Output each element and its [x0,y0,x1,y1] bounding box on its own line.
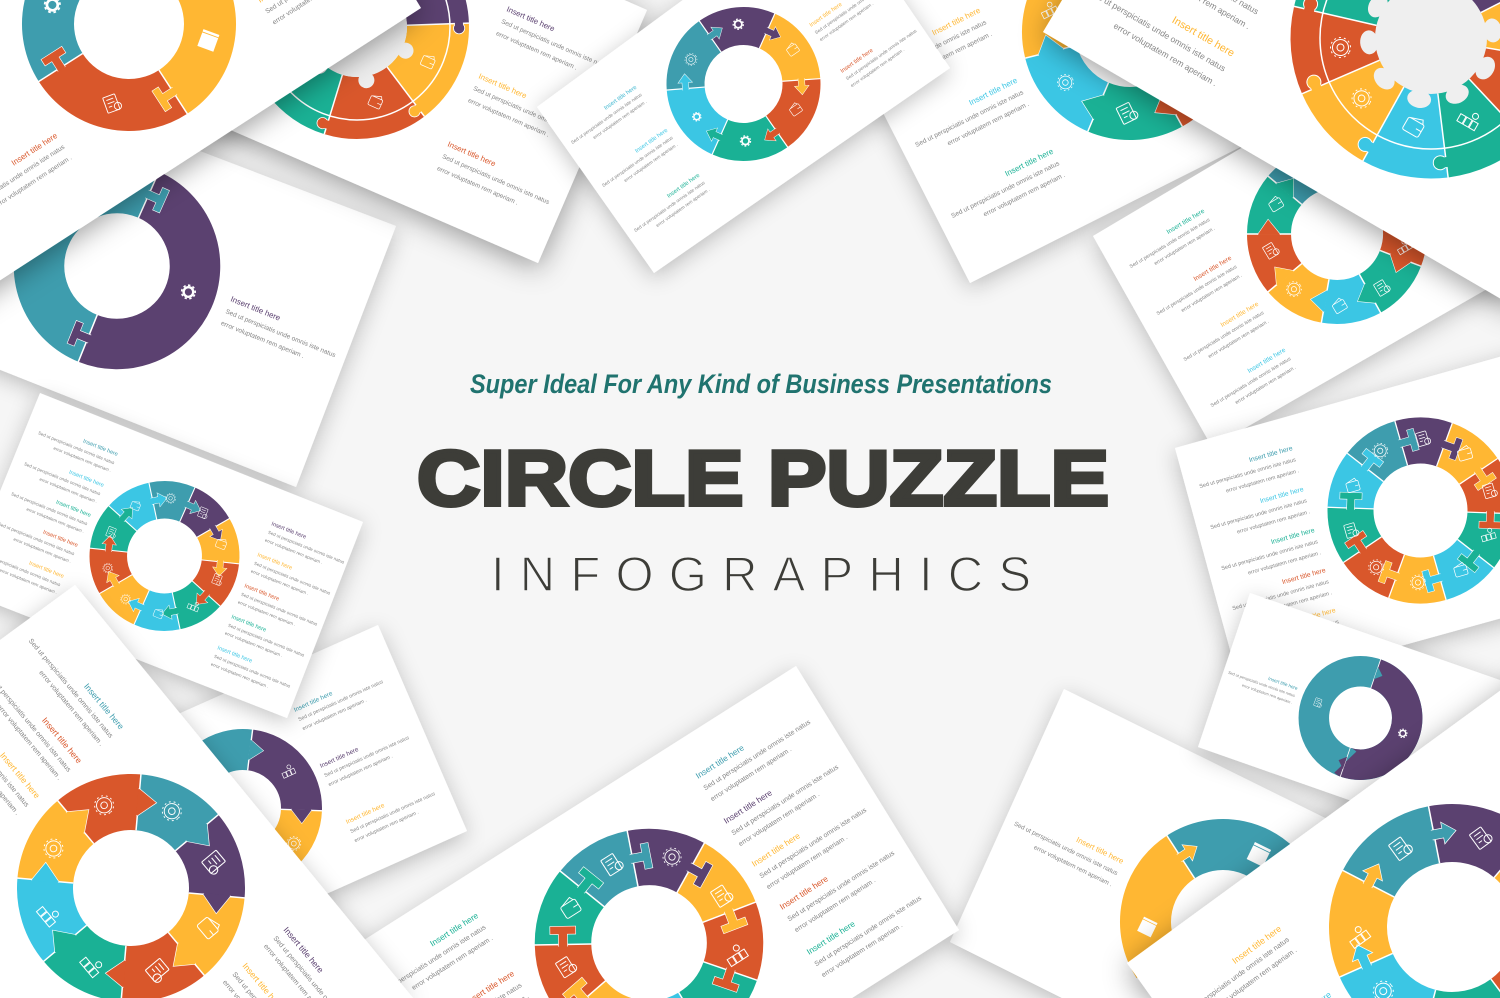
icon: tools [153,607,164,619]
text block: green title: error voluptatem rem aperiam . [1247,550,1322,576]
icon: newspaper [601,852,625,876]
text block: green title: Insert title here [1004,146,1055,178]
slide card [0,0,421,345]
text block: green title: error voluptatem rem aperiam . [982,172,1067,218]
text block: green title: Sed ut perspiciatis unde omnis iste natus [633,180,706,233]
slide card [0,393,363,718]
text block: yellow title, lower [221,961,330,998]
text block: yellow title: error voluptatem rem aperiam . [909,31,994,77]
panel: slide with three-piece T ring, top left [0,0,421,345]
icon: newspaper [1415,430,1431,447]
icon: checklist [710,883,734,908]
icon: idea [164,492,177,505]
text block: yellow title: Insert title here [1170,14,1237,60]
text block: orange title, left [0,513,79,564]
text block: orange title, left [405,968,531,998]
text block: orange title: Sed ut perspiciatis unde omnis iste natus [787,850,896,923]
icon: bar growth [1137,917,1158,937]
slide card [800,0,1300,283]
text block: deep teal title: Insert title here [82,681,126,731]
slide card [537,0,950,273]
text block: orange title: Insert title here [840,48,875,75]
text block: green title [944,146,1067,232]
text block: yellow title: Sed ut perspiciatis unde omnis iste natus [1183,310,1266,363]
text block: blue title: Insert title here [1259,486,1305,505]
icon: newspaper [1373,278,1391,296]
icon: people [1480,527,1496,542]
slide card [1093,60,1500,447]
text block: yellow title, left: Insert title here [28,561,64,580]
text block: purple title: error voluptatem rem aperiam . [328,754,394,788]
text block: yellow title: error voluptatem rem aperiam . [1112,21,1219,88]
text block: blue title: error voluptatem rem aperiam . [623,142,679,183]
icon: coins [91,792,117,819]
text block: green title [1217,527,1322,583]
text block: yellow title: Sed ut perspiciatis unde omnis iste natus [1242,619,1340,652]
text block: blue title: Sed ut perspiciatis unde omnis iste natus [1210,498,1308,531]
ring chart: T-joint pieces [17,0,241,136]
panel: slide with two-piece ring, lower right [1198,593,1500,874]
icon: idea [1284,279,1304,299]
text block: orange title: Sed ut perspiciatis unde omnis iste natus [845,28,918,81]
text block: yellow title [345,781,441,844]
ring chart: two pieces [14,163,220,369]
panel: slide with nine-piece T ring, bottom centre [320,666,959,998]
text block: deep teal title: Sed ut perspiciatis unde omnis iste natus [27,638,114,740]
text block: blue title, left: error voluptatem rem aperiam . [39,477,98,504]
text block: deep teal title: Sed ut perspiciatis unde omnis iste natus [570,92,643,145]
text block: deep teal title, left: Sed ut perspiciatis unde omnis iste natus [37,430,116,466]
icon: cloud [691,111,703,123]
text block: yellow title: Insert title here [1075,835,1125,866]
icon: wallet [1345,477,1360,493]
slide card [150,0,647,263]
text block: deep teal title: error voluptatem rem aperiam . [1225,468,1300,494]
text block: deep teal title [694,705,819,803]
text block: orange title [1228,567,1333,623]
text block: yellow title: error voluptatem rem aperiam . [467,97,550,139]
icon: checklist [106,526,118,539]
text block: orange title: error voluptatem rem aperiam . [436,165,519,207]
icon: people [1457,107,1482,131]
text block: blue title: Insert title here [634,128,669,155]
text block: deep teal title [1225,663,1299,705]
text block: purple title: error voluptatem rem aperiam . [264,538,323,565]
text block: green title [628,172,711,240]
text block: yellow title: Insert title here [1291,607,1337,626]
ring chart: arrow joints [663,3,824,165]
icon: document [1039,0,1059,19]
text block: green title: Insert title here [1166,208,1206,236]
icon: idea [119,593,132,606]
text block: yellow title, left: error voluptatem rem aperiam . [0,568,58,595]
slide card [0,90,396,487]
text block: deep teal title, left: Insert title here [82,439,118,458]
icon: safe [1262,241,1280,259]
text block: green title, left: Sed ut perspiciatis unde omnis iste natus [10,491,89,527]
panel: slide with six-piece arrow ring, top centre [537,0,950,273]
icon: idea [1409,573,1427,592]
text block: purple title [264,521,349,573]
icon: idea [40,835,67,862]
icon: safe [555,955,578,978]
text block: deep teal title: error voluptatem rem aperiam . [37,670,104,748]
text block: deep teal title: Insert title here [603,85,638,112]
text block: yellow title: error voluptatem rem aperiam . [766,834,849,891]
text block: yellow title [256,0,379,26]
text block: purple title [220,295,343,371]
text block: orange title: Insert title here [446,140,497,168]
text block: yellow title: Insert title here [477,72,528,100]
text block: yellow title: Insert title here [345,802,386,826]
text block: blue title [1204,346,1298,418]
slide card [1043,0,1500,310]
icon: tools [1331,297,1348,314]
icon: coins [101,562,114,575]
text block: orange title: Insert title here [40,715,84,765]
text block: yellow title [467,72,587,150]
text block: green title: error voluptatem rem aperiam . [821,922,904,979]
ring chart: wedge pieces [1019,0,1241,143]
text block: yellow title: Sed ut perspiciatis unde omnis iste natus [759,807,868,880]
text block: green title [1123,207,1217,279]
text block: blue title: Insert title here [216,645,253,665]
text block: green title: Sed ut perspiciatis unde omnis iste natus [814,895,923,968]
ring chart: wedge pieces [1241,138,1433,330]
text block: orange title: Insert title here [10,131,60,168]
text block: purple title: error voluptatem rem aperiam . [738,791,821,848]
text block: purple title [722,750,847,848]
text block: blue title: Sed ut perspiciatis unde omnis iste natus [914,89,1025,149]
icon: badges [1345,924,1371,948]
icon: people [80,952,105,978]
panel: slide with small two-piece wedge ring, lower left [120,625,467,946]
icon: wallet [215,537,228,550]
text block: orange title: Insert title here [1281,567,1327,586]
text block: green title: Insert title here [805,918,857,957]
text block: purple title: Insert title here [281,925,326,975]
text block: yellow title: Sed ut perspiciatis unde omnis iste natus [253,561,332,596]
text block: yellow title: error voluptatem rem aperiam . [1207,319,1270,360]
text block: orange title: Sed ut perspiciatis unde omnis iste natus [441,153,550,206]
icon: gear [733,19,743,29]
text block: green title, left: error voluptatem rem aperiam . [411,935,494,992]
text block: blue title: Insert title here [1247,347,1287,375]
text block: yellow title [871,5,994,91]
text block: purple title: Sed ut perspiciatis unde omnis iste natus [500,18,609,71]
text block: orange title: Sed ut perspiciatis unde omnis iste natus [1232,579,1330,612]
panel: slide with wedge ring, top right [800,0,1300,283]
ring chart: two pieces [1301,658,1420,778]
text block: orange title [0,131,74,226]
text block: orange title [237,583,322,635]
text block: blue title, left: Sed ut perspiciatis unde omnis iste natus [23,461,102,497]
text block: orange title: Sed ut perspiciatis unde omnis iste natus [240,592,319,627]
text block: purple title: Sed ut perspiciatis unde omnis iste natus [267,530,346,565]
text block: purple title: Insert title here [229,295,282,323]
text block: orange title [436,140,556,218]
text block: purple title: Insert title here [505,5,556,33]
text block: green title, left: error voluptatem rem aperiam . [26,507,85,534]
text block: orange title: error voluptatem rem aperiam . [1258,590,1333,616]
ring chart: wedge pieces [10,767,252,998]
icon: idea [285,834,303,853]
text block: purple title: Sed ut perspiciatis unde omnis iste natus [731,764,840,837]
text block: green title: Sed ut perspiciatis unde omnis iste natus [227,623,306,658]
text block: blue title: Insert title here [968,75,1019,107]
text block: blue title, left [20,453,105,504]
text block: yellow title: error voluptatem rem aperiam . [1032,844,1113,888]
ring chart: arrow joints [1319,794,1500,998]
ring chart: puzzle sectors [1292,0,1500,178]
icon: newspaper [202,850,228,876]
text block: green title: Sed ut perspiciatis unde omnis iste natus [950,160,1061,220]
panel: slide with ten-piece T ring, right [1175,340,1500,690]
text block: blue title: error voluptatem rem aperiam . [1234,365,1297,406]
icon: checklist [1344,522,1360,538]
text block: green title: Sed ut perspiciatis unde omnis iste natus [1221,539,1319,572]
icon: people [280,763,296,778]
text block: purple title [495,5,615,83]
tagline: Super Ideal For Any Kind of Business Presentations [470,369,1052,399]
text block: deep teal title: Sed ut perspiciatis unde omnis iste natus [1227,670,1296,698]
wedge joints [1336,667,1385,769]
icon: monitor [1313,698,1323,708]
icon: book [145,958,171,984]
text block: orange title: error voluptatem rem aperiam . [850,47,905,88]
icon: people [723,942,748,967]
text block: orange title [840,20,923,88]
icon: cart [788,101,803,116]
text block: deep teal title: Insert title here [694,742,746,781]
icon: newspaper [197,507,210,519]
icon: people [187,600,200,612]
text block: blue title [1206,486,1311,542]
slide card [1175,340,1500,690]
ring chart: wedge pieces [178,729,323,873]
panel: slide with ten-piece arrow ring, left [0,393,363,718]
text block: purple title: Sed ut perspiciatis unde omnis iste natus [323,735,411,779]
text block: deep teal title: Sed ut perspiciatis unde omnis iste natus [297,679,385,723]
icon: tools [1453,562,1468,577]
icon: tools [36,901,62,927]
icon: idea [1055,72,1076,93]
text block: purple title: Insert title here [319,746,360,770]
panel: slide with nine-piece wedge ring, right [1093,60,1500,447]
text block: orange title: Insert title here [243,583,280,603]
text block: deep teal title: error voluptatem rem aperiam . [710,746,793,803]
title: infographics: INFOGRAPHICS [491,548,1031,602]
text block: purple title: error voluptatem rem aperiam . [220,320,305,360]
text block: yellow title: Insert title here [809,2,844,29]
text block: deep teal title [17,627,126,748]
text block: yellow title: error voluptatem rem aperiam . [250,569,309,596]
panel: slide with knob ring, top [150,0,647,263]
icon: cart [368,93,384,109]
icon: coin stack [1327,34,1354,61]
text block: yellow title, left [0,544,65,595]
ring chart: T-joint pieces [1322,412,1500,609]
text block: yellow title: Insert title here [931,5,982,37]
icon: gear [1397,728,1408,739]
icon: tools [1402,113,1427,138]
text block: yellow title: Insert title here [1230,923,1283,966]
slide card [320,666,959,998]
text block: purple title [319,725,415,788]
icon: idea [1371,442,1390,460]
icon: tablet [1116,101,1139,125]
text block: blue title [210,645,295,697]
icon: wallet [1267,195,1284,212]
title: circle puzzle: CIRCLE PUZZLE [417,434,1109,522]
text block: orange title: error voluptatem rem aperiam . [794,877,877,934]
panel: slide with seven-piece arrow ring, bottom right corner [1127,647,1500,998]
text block: purple title: Sed ut perspiciatis unde omnis iste natus [224,308,337,359]
text block: purple title [262,925,371,998]
text block: blue title [908,75,1031,161]
text block: deep teal title: error voluptatem rem aperiam . [592,99,648,140]
text block: yellow title [0,696,42,817]
icon: wallet [130,499,142,511]
text block: green title, left: Insert title here [428,910,480,948]
text block: orange title [778,836,903,934]
icon: wallet [197,914,222,940]
icon: person [420,53,437,69]
icon: target [683,51,699,68]
text block: green title [805,881,930,979]
text block: orange title: Insert title here [1193,255,1233,283]
text block: green title, left: Insert title here [55,500,91,519]
text block: yellow title: Insert title here [750,830,802,869]
icon: coin [43,0,62,15]
icon: people [1369,977,1397,998]
text block: yellow title [1177,300,1271,372]
text block: yellow title: error voluptatem rem aperiam . [354,810,420,844]
icon: idea [158,798,185,825]
text block: deep teal title, left [34,422,119,473]
icon: monitor [1247,842,1271,867]
text block: green title, left: Sed ut perspiciatis unde omnis iste natus [378,924,488,997]
icon: coin stack [660,845,684,869]
icon: abacus [1395,238,1412,255]
text block: orange title: error voluptatem rem aperiam . [1180,273,1243,314]
text block: yellow title [250,552,335,604]
ring chart: arrow joints [85,477,244,635]
icon: id badge [103,93,123,113]
slide card [1127,647,1500,998]
slide card [0,585,413,998]
text block: yellow title [750,793,875,891]
text block: blue title: Sed ut perspiciatis unde omnis iste natus [1210,356,1293,409]
text block: green title [224,614,309,666]
text block: yellow title: Sed ut perspiciatis unde omnis iste natus [1013,821,1119,877]
text block: deep teal title: error voluptatem rem aperiam . [1241,683,1293,705]
icon: calendar [197,29,219,52]
text block: blue title [596,127,679,195]
text block: purple title: Insert title here [722,787,774,826]
icon: gear [180,283,197,301]
text block: green title, left [7,483,92,534]
slide card [950,689,1400,998]
text block: orange title, left: error voluptatem rem aperiam . [13,537,72,564]
icon: newspaper [1469,825,1494,850]
ring chart: puzzle sectors [244,0,470,140]
text block: orange title: Insert title here [778,873,830,912]
text block: orange title: Sed ut perspiciatis unde omnis iste natus [1156,264,1239,317]
text block: orange title: error voluptatem rem aperiam . [237,600,296,627]
text block: deep teal title: Insert title here [1248,445,1294,464]
text block: deep teal title: Sed ut perspiciatis unde omnis iste natus [1199,457,1297,490]
icon: wallet [558,895,582,919]
text block: yellow title: Insert title here [1220,301,1260,329]
text block: blue title, left: Insert title here [68,470,104,489]
text block: green title: Sed ut perspiciatis unde omnis iste natus [1129,217,1212,270]
panel: slide with two-piece T ring, left [0,90,396,487]
text block: blue title: error voluptatem rem aperiam . [210,662,269,689]
text block: green title: error voluptatem rem aperiam . [224,631,283,658]
text block: deep teal title [565,84,648,152]
text block: yellow title: Sed ut perspiciatis unde omnis iste natus [877,19,988,79]
text block: deep teal title [293,669,389,732]
panel: slide with eight-piece wedge ring, bottom left [0,585,413,998]
text block: blue title: error voluptatem rem aperiam . [946,101,1031,147]
text block: deep teal title: Insert title here [1267,676,1299,691]
text block: yellow title: Sed ut perspiciatis unde omnis iste natus [349,791,437,835]
icon: idea [1349,85,1375,111]
text block: orange title [1150,254,1244,326]
text block: deep teal title [1195,445,1300,501]
icon: tool [785,42,800,57]
text block: orange title, left: Insert title here [42,530,78,549]
icon: wallet [1456,445,1473,461]
text block: purple title: Insert title here [270,521,307,541]
text block: upper, cropped [1112,0,1270,31]
slide card [1198,593,1500,874]
text block: blue title: error voluptatem rem aperiam . [1236,509,1311,535]
panel: slide with arrow ring, bottom right [950,689,1400,998]
text block: green title: Insert title here [1270,527,1316,546]
ring chart: two visible pieces [1116,815,1330,998]
icon: coins [1367,558,1385,577]
text block: green title: error voluptatem rem aperiam . [1153,226,1216,267]
text block: deep teal title, left: error voluptatem rem aperiam . [53,446,112,473]
text block: blue title: Sed ut perspiciatis unde omnis iste natus [213,654,292,689]
icon: refresh [740,136,751,146]
text block: green title: error voluptatem rem aperiam . [655,187,711,228]
text block: deep teal title: error voluptatem rem aperiam . [302,698,368,732]
text block: green title: Insert title here [230,614,267,634]
text block: yellow title: Insert title here [256,552,293,572]
text block: yellow title [1007,808,1125,888]
text block: green title: Insert title here [666,173,701,200]
text block: blue title: Sed ut perspiciatis unde omnis iste natus [601,135,674,188]
panel: slide with large knob ring, top right corner [1043,0,1500,310]
heading group [417,369,1109,602]
text block: yellow title: Sed ut perspiciatis unde omnis iste natus [472,85,581,138]
icon: book [212,573,224,586]
text block: deep teal title: Insert title here [293,690,334,714]
icon: book [1482,482,1498,499]
slide card [120,625,467,946]
ring chart: T-joint pieces [528,822,770,998]
text block: purple title: error voluptatem rem aperiam . [495,30,578,72]
icon: checklist [1388,835,1414,861]
text block: yellow title: error voluptatem rem aperiam . [819,1,874,42]
text block: deep teal title: Sed ut perspiciatis unde omnis iste natus [703,719,812,792]
